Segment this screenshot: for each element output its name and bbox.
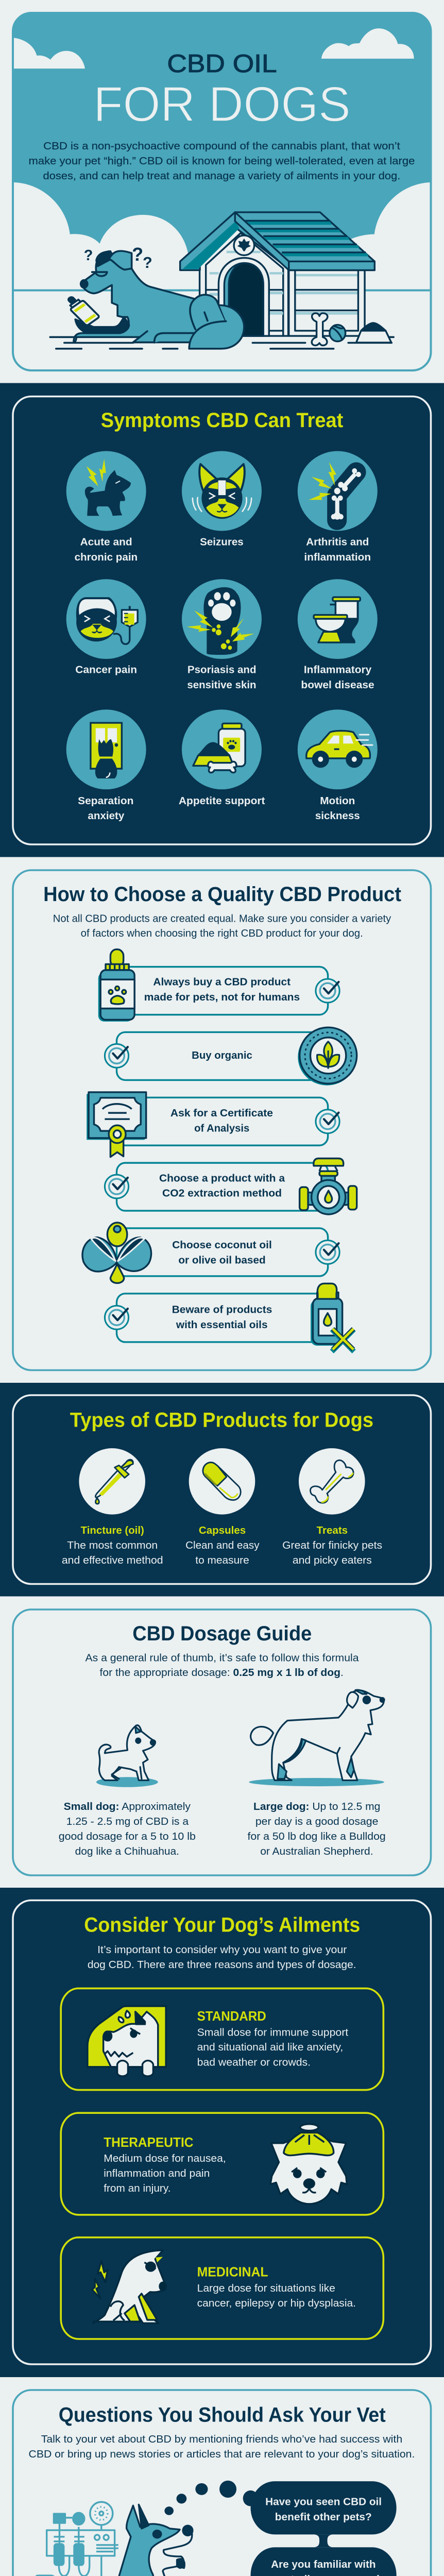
horizon line	[14, 289, 431, 291]
card: therapeutic: Medium dose for nausea,	[104, 2153, 226, 2164]
thought bubbles	[164, 2481, 258, 2515]
small dog text: dog like a Chihuahua.	[75, 1845, 179, 1857]
small dog text: Small dog: Approximately	[64, 1801, 191, 1812]
large dog text: for a 50 lb dog like a Bulldog	[247, 1831, 386, 1842]
checklist text: or olive oil based	[178, 1255, 266, 1266]
product text: Treats	[317, 1525, 348, 1536]
checklist answers: with essential oils	[176, 1319, 268, 1331]
icon: CO2 extraction valve	[300, 1159, 357, 1214]
icon: dog with ice pack	[270, 2124, 347, 2204]
intro text: Not all CBD products are created equal. Make sure you consider a variety	[53, 913, 391, 924]
bubble questions: Have you seen CBD oil	[265, 2496, 382, 2507]
sitting dog	[74, 2504, 203, 2576]
icon: essential oil bottle with cross	[311, 1293, 354, 1351]
product text: Clean and easy	[185, 1540, 260, 1551]
question marks: ?	[84, 247, 93, 263]
title: FOR DOGS	[93, 77, 351, 132]
icon: dog with lightning	[92, 2250, 166, 2323]
icon: toilet	[314, 597, 360, 642]
heading: CBD Dosage Guide	[132, 1622, 312, 1645]
question marks: ?	[143, 255, 152, 272]
speech bubbles	[251, 2481, 397, 2576]
icon: organic seal	[298, 1027, 357, 1086]
product text: Capsules	[199, 1525, 246, 1536]
icon: pet bottle	[98, 950, 134, 1022]
icon: acute pain dog	[85, 459, 131, 516]
symptom labels: inflammation	[304, 552, 371, 563]
small dog text: 1.25 - 2.5 mg of CBD is a	[66, 1816, 189, 1827]
symptom labels: anxiety	[88, 810, 124, 822]
symptom labels: Cancer pain	[75, 664, 137, 676]
product text: Great for finicky pets	[282, 1540, 382, 1551]
checklist answers: Beware of products	[172, 1304, 272, 1316]
symptom labels: Seizures	[200, 536, 244, 548]
product circles	[79, 1448, 365, 1515]
checklist text: made for pets, not for humans	[144, 992, 300, 1003]
icon: cancer pain dog	[76, 597, 138, 644]
product text: to measure	[195, 1554, 249, 1566]
card text: MEDICINAL	[197, 2265, 268, 2280]
hero clouds	[14, 28, 431, 369]
large dog text: or Australian Shepherd.	[260, 1845, 373, 1857]
heading: Questions You Should Ask Your Vet	[59, 2403, 386, 2426]
checklist text: Choose a product with a	[159, 1173, 285, 1184]
panel: consider ailments	[13, 1900, 431, 2364]
bone, ball and bowl	[312, 313, 391, 345]
symptom labels: Separation	[78, 795, 133, 807]
panel: how to choose a quality product	[13, 870, 431, 1370]
icon: separation anxiety door and dog	[91, 723, 122, 778]
heading: How to Choose a Quality CBD Product	[43, 883, 401, 906]
card text: THERAPEUTIC	[104, 2135, 193, 2150]
vet office line art	[14, 2502, 249, 2576]
intro text	[88, 1944, 356, 1970]
checklist text: Always buy a CBD product	[153, 976, 291, 988]
shadows	[96, 1777, 384, 1787]
checklist text: CO2 extraction method	[162, 1188, 282, 1199]
symptom labels: Acute and	[80, 536, 132, 548]
icon: motion sickness car	[306, 731, 372, 767]
intro text	[29, 2433, 415, 2460]
checklist text	[144, 976, 300, 1266]
panel: questions for your vet	[13, 2390, 431, 2576]
large dog text: Large dog: Up to 12.5 mg	[253, 1801, 380, 1812]
product text: and picky eaters	[293, 1554, 372, 1566]
large dog text: per day is a good dosage	[255, 1816, 378, 1827]
intro text: of factors when choosing the right CBD product for your dog.	[81, 928, 363, 939]
heading: Types of CBD Products for Dogs	[70, 1409, 373, 1432]
card: medicinal: Large dose for situations like	[197, 2282, 335, 2294]
symptom labels: Motion	[320, 795, 355, 807]
panel: dosage guide	[13, 1609, 431, 1875]
small dog	[99, 1725, 155, 1781]
intro text: CBD or bring up news stories or articles that are relevant to your dog’s situation.	[29, 2448, 415, 2460]
intro paragraph: make your pet “high.” CBD oil is known for being well-tolerated, even at large	[29, 155, 415, 167]
product text: Tincture (oil)	[81, 1525, 144, 1536]
question marks: ?	[132, 244, 143, 265]
question marks	[84, 244, 152, 272]
card text: STANDARD	[197, 2009, 266, 2024]
ground lines	[50, 337, 394, 349]
card: medicinal: cancer, epilepsy or hip dysplasia.	[197, 2297, 356, 2309]
title: CBD OIL	[167, 50, 277, 78]
icon: appetite jar and bowl	[193, 723, 245, 773]
symptom labels: chronic pain	[75, 552, 138, 563]
icon: anxious dog	[88, 2006, 166, 2076]
card: standard: bad weather or crowds.	[197, 2056, 311, 2068]
card: therapeutic: from an injury.	[104, 2182, 170, 2194]
checklist text: Buy organic	[192, 1050, 252, 1061]
symptom labels: Appetite support	[179, 795, 265, 807]
icon: bone treat	[311, 1460, 353, 1503]
large dog	[251, 1690, 384, 1781]
panel: symptoms	[13, 397, 431, 844]
dog house	[180, 212, 374, 336]
checklist answers	[172, 1304, 272, 1331]
checklist text: Ask for a Certificate	[170, 1108, 273, 1119]
symptom labels: Arthritis and	[306, 536, 369, 548]
intro paragraph	[29, 140, 415, 182]
card: standard	[61, 1988, 383, 2090]
symptom labels: sickness	[315, 810, 360, 822]
bubble questions	[263, 2496, 383, 2576]
card: standard: and situational aid like anxiety,	[197, 2041, 343, 2053]
icon circles	[66, 451, 378, 789]
symptom labels: Psoriasis and	[187, 664, 257, 676]
card: therapeutic	[61, 2113, 383, 2215]
intro text: It’s important to consider why you want to give your	[97, 1944, 347, 1955]
large dog text	[247, 1801, 386, 1857]
icon: dropper	[95, 1460, 133, 1504]
icon: seizures dog	[193, 464, 251, 519]
symptom labels: Inflammatory	[304, 664, 371, 676]
checklist text: Choose coconut oil	[172, 1240, 272, 1251]
intro paragraph: CBD is a non-psychoactive compound of the cannabis plant, that won’t	[43, 140, 400, 152]
icon: certificate	[87, 1092, 146, 1157]
small dog text	[59, 1801, 196, 1857]
hero dog	[63, 251, 244, 349]
icon: coconut and olive	[82, 1223, 151, 1283]
formula text	[85, 1652, 359, 1679]
intro paragraph: doses, and can help treat and manage a variety of ailments in your dog.	[43, 170, 400, 182]
symptom labels: sensitive skin	[187, 680, 257, 691]
symptom labels: bowel disease	[301, 680, 374, 691]
intro text: Talk to your vet about CBD by mentioning friends who’ve had success with	[41, 2433, 402, 2445]
icon: arthritis leg	[309, 462, 361, 520]
heading: Consider Your Dog’s Ailments	[84, 1913, 360, 1936]
small dog text: good dosage for a 5 to 10 lb	[59, 1831, 196, 1842]
panel border	[13, 13, 431, 370]
product text: and effective method	[62, 1554, 163, 1566]
product text: The most common	[67, 1540, 158, 1551]
panel: types of CBD products	[13, 1395, 431, 1584]
checklist text: of Analysis	[194, 1123, 249, 1134]
intro text: dog CBD. There are three reasons and types of dosage.	[88, 1959, 356, 1970]
bubble questions: Are you familiar with	[271, 2558, 376, 2570]
heading: Symptoms CBD Can Treat	[101, 409, 343, 432]
checklist pills	[116, 967, 328, 1342]
card: therapeutic: inflammation and pain	[104, 2167, 210, 2179]
intro text	[53, 913, 391, 939]
top icon of last item	[317, 1283, 337, 1299]
card: medicinal	[61, 2238, 383, 2339]
icon: capsule	[203, 1463, 241, 1500]
formula text: As a general rule of thumb, it’s safe to follow this formula	[85, 1652, 359, 1664]
title	[93, 50, 351, 132]
card: standard: Small dose for immune support	[197, 2026, 349, 2038]
checkmarks	[105, 979, 339, 1329]
icon: psoriasis paw	[187, 587, 254, 655]
product text	[62, 1525, 382, 1566]
formula text: for the appropriate dosage: 0.25 mg x 1 lb of dog .	[100, 1667, 344, 1679]
symptom labels	[75, 536, 374, 822]
bubble questions: benefit other pets?	[275, 2511, 372, 2522]
panel: hero	[13, 13, 431, 370]
